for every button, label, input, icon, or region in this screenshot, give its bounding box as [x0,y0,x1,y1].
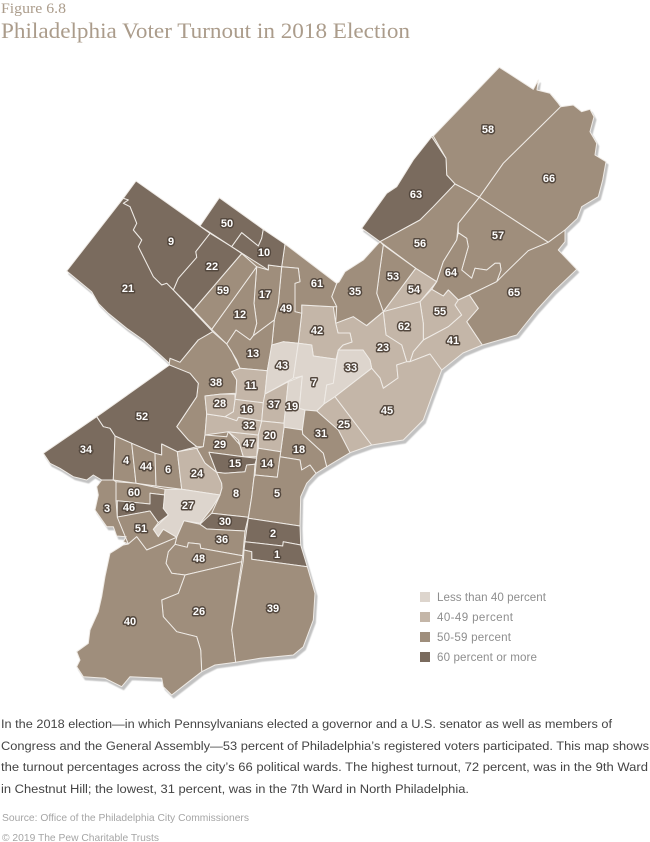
ward 16 [225,399,263,421]
ward 46: 46 [123,502,135,514]
ward 3 [95,480,128,544]
ward 35: 35 [349,286,361,298]
ward 29: 29 [214,439,226,451]
ward 45 [335,354,442,445]
ward 37 [262,382,288,423]
ward 33 [324,350,372,404]
ward 35 [332,242,383,327]
ward 1: 1 [274,549,280,561]
description text: in Chestnut Hill; the lowest, 31 percent, was in the 7th Ward in North Philadelphia. [1,782,469,796]
ward 30 [200,513,248,531]
ward 19: 19 [286,401,298,413]
ward 1 [244,542,307,567]
ward 54: 54 [408,284,421,296]
ward 26 [162,562,242,672]
title: Philadelphia Voter Turnout in 2018 Election [1,18,410,43]
ward 3: 3 [104,503,110,515]
description text [1,717,649,796]
ward 7 [293,343,337,411]
ward 16: 16 [241,404,253,416]
ward 12: 12 [234,309,246,321]
ward 42 [298,305,352,359]
ward 61 [282,244,337,313]
ward 5: 5 [274,488,280,500]
ward 21 [67,198,213,363]
ward 42: 42 [311,325,323,337]
ward 55: 55 [434,306,446,318]
ward 50 [200,198,263,247]
map base outline [43,67,606,695]
ward 27: 27 [182,500,194,512]
ward 43 [265,342,298,394]
ward 2: 2 [270,528,276,540]
ward 31 [302,410,350,467]
ward 40: 40 [124,616,136,628]
ward 66 [479,105,606,242]
ward 60 [116,482,165,504]
ward 56 [380,184,479,282]
ward 50: 50 [221,218,233,230]
ward 63 [362,137,455,242]
ward 39: 39 [267,603,279,615]
ward 23: 23 [377,342,389,354]
ward 59 [193,254,257,329]
ward 60: 60 [128,487,140,499]
ward 51: 51 [135,523,147,535]
ward 14 [255,448,281,477]
ward 49: 49 [280,303,292,315]
ward 9 [123,181,210,290]
ward 52: 52 [136,411,148,423]
ward 25: 25 [338,419,350,431]
ward 28 [205,394,235,417]
ward 30: 30 [219,516,231,528]
ward 10 [232,229,285,270]
legend: 40-49 percent: 40-49 percent [437,611,514,624]
ward 21: 21 [122,283,134,295]
ward 6 [155,444,182,489]
ward 62: 62 [398,321,410,333]
ward 56: 56 [414,238,426,250]
ward 52 [97,365,198,455]
ward 53 [377,245,416,312]
ward 19 [284,376,305,430]
ward 11: 11 [245,380,257,392]
ward 54 [383,268,437,312]
ward 8 [212,464,255,517]
ward 47 [228,432,258,457]
ward 61: 61 [311,278,323,290]
ward 51 [116,511,177,550]
ward 44 [132,443,156,486]
ward 18: 18 [293,444,305,456]
ward 63: 63 [410,189,422,201]
legend [420,591,547,664]
ward 13 [227,320,274,371]
ward 34 [43,417,115,480]
ward 9: 9 [168,236,174,248]
ward 55 [420,289,462,340]
ward 31: 31 [315,428,327,440]
ward 22 [173,233,242,310]
ward 5 [248,457,316,526]
ward 24 [177,448,222,495]
ward 10: 10 [258,247,270,259]
ward 65: 65 [508,287,520,299]
ward 12 [212,267,257,344]
ward 41: 41 [447,335,459,347]
ward map [43,67,606,695]
ward 58: 58 [482,124,494,136]
ward 40 [77,537,202,695]
ward 33: 33 [345,362,357,374]
ward 57 [458,197,548,282]
ward 29 [197,432,243,472]
description text: In the 2018 election—in which Pennsylvanians elected a governor and a U.S. senator as well as members of [1,717,613,731]
ward 48 [166,543,243,575]
ward 20: 20 [264,430,276,442]
ward 7: 7 [311,377,317,389]
description text: Congress and the General Assembly—53 percent of Philadelphia’s registered voters participated. This map shows [1,739,649,753]
ward 59: 59 [217,285,229,297]
ward 53: 53 [387,271,399,283]
ward 14: 14 [261,458,274,470]
ward 32: 32 [243,420,255,432]
ward 26: 26 [193,606,205,618]
ward 48: 48 [193,553,205,565]
ward 46 [117,493,168,523]
ward 58 [433,67,561,197]
ward 66: 66 [543,173,555,185]
ward 4 [113,436,136,483]
ward 15 [209,452,257,473]
ward 25 [317,397,372,453]
ward 37: 37 [268,399,280,411]
ward 22: 22 [206,261,218,273]
ward 43: 43 [276,360,288,372]
ward 24: 24 [191,468,204,480]
ward 13: 13 [247,348,259,360]
ward 17 [253,265,282,336]
ward 20 [258,421,284,452]
ward 2 [245,518,301,546]
ward 27 [153,489,220,537]
figure number: Figure 6.8 [1,1,66,17]
legend: less than 40 percent: Less than 40 percent [437,591,547,604]
ward 34: 34 [80,444,93,456]
ward 44: 44 [140,461,153,473]
ward 4: 4 [123,455,130,467]
ward 32 [205,414,262,435]
ward 23 [336,312,407,388]
ward 65 [467,230,577,345]
ward 17: 17 [259,289,271,301]
ward 57: 57 [492,230,504,242]
ward 6: 6 [165,464,171,476]
source: Source: Office of the Philadelphia City Commissioners [2,813,249,824]
ward 36 [175,521,245,556]
description text: the turnout percentages across the city’s 66 political wards. The highest turnout, 72 percent, was in the 9th Ward [1,760,648,774]
ward 38: 38 [210,377,222,389]
ward 64 [432,233,501,300]
legend: 50-59 percent: 50-59 percent [437,631,512,644]
ward 64: 64 [445,267,458,279]
ward 45: 45 [381,405,393,417]
ward 11 [232,368,267,403]
ward 36: 36 [216,534,228,546]
legend: 60 percent or more: 60 percent or more [437,651,537,664]
ward 15: 15 [229,458,241,470]
ward 39 [232,550,315,662]
ward 41 [410,295,482,370]
ward 28: 28 [214,398,226,410]
ward 47: 47 [243,438,255,450]
ward 8: 8 [233,488,239,500]
ward 62 [383,302,423,362]
ward 49 [272,267,302,347]
ward 18 [280,427,327,473]
ward 38 [169,332,240,447]
